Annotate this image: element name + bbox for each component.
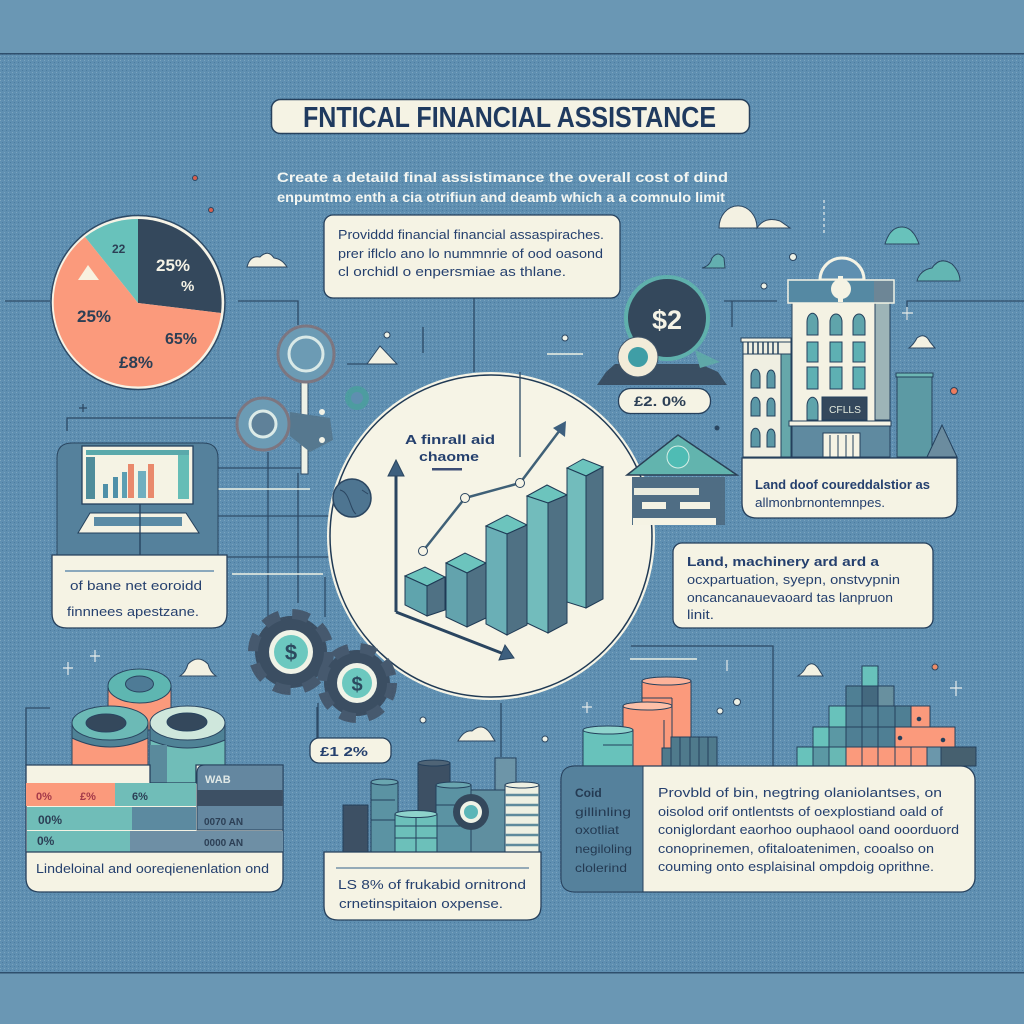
icon: coral cylinders [583,677,717,766]
panel: bottom right text: oisolod orif ontlentsts of oexplostiand oald of [658,804,943,819]
icon: bank building [741,258,957,457]
callout: bottom center: LS 8% of frukabid ornitrond [338,877,526,892]
panel: bottom right text: negiloling [575,842,632,856]
callout: land machinery [673,543,933,628]
panel: percentage table [26,765,283,892]
icons: magnifiers [237,326,366,474]
callout: finance: finnnees apestzane. [67,604,199,619]
icon: small bank [627,435,737,525]
panel: bottom right text: conoprinemen, ofitaloatenimen, cooalso on [658,841,934,856]
globe icon [333,479,371,517]
panel: bottom right text: Provbld of bin, negtring olaniolantses, on [658,785,942,800]
title: FNTICAL FINANCIAL ASSISTANCE [303,102,716,134]
pie chart: £8% [119,353,153,372]
panel: laptop [57,443,218,555]
callout: top center: cl orchidl o enpersmiae as thlane. [338,264,566,279]
panel: bottom right text: Coid [575,786,602,800]
callout: bottom center: crnetinspitaion oxpense. [339,896,503,911]
icon: dollar gears: $ [351,674,363,696]
callout: top center: Providdd financial financial assaspiraches. [338,227,604,242]
chart: pixel pyramid [797,666,976,766]
subtitle text [277,169,728,205]
pill: gear value [310,738,391,763]
chart axes [388,460,514,660]
bar chart: financial aid [405,459,603,635]
connector lines [5,298,1024,766]
callout: finance: of bane net eoroidd [70,578,202,593]
pill: badge value [618,388,710,414]
panel: percentage table: £% [80,791,96,803]
callout: land right [742,458,957,518]
central circle [327,372,655,700]
top band [0,0,1024,54]
panel: percentage table: 0070 AN [204,817,243,828]
callout: land machinery: Land, machinery ard ard a [687,554,880,569]
panel: bottom right text: clolerind [575,861,627,875]
panel: bottom right text: gillinling [575,805,631,819]
icon: city of cylinders [343,758,539,852]
chart label: A finrall aid [405,432,495,447]
callout: top center [324,215,620,298]
pill: gear value: £1 2% [320,744,369,759]
callout: top center: prer iflclo ano lo nummnrie of ood oasond [338,246,603,261]
pie chart: 65% [165,331,197,348]
callout: land machinery: oncancanauevaoard tas lanpruon [687,590,893,605]
callout: land right: allmonbrnontemnpes. [755,495,885,510]
callout: land machinery: linit. [687,607,714,622]
panel: percentage table: 00% [38,813,62,827]
icon: coin stacks [72,669,225,783]
panel: percentage table: 0% [36,791,52,803]
pie chart: 22 [112,242,126,256]
callout: land right: Land doof coureddalstior as [755,477,930,492]
pie chart: 25% [156,256,190,275]
sparkles [63,200,962,713]
panel: percentage table: 0% [37,834,55,848]
subtitle text: enpumtmo enth a cia otrifiun and deamb which a a comnulo limit [277,189,725,205]
trend arrow [418,372,566,556]
panel: bottom right text: coniglordant eaorhoo ouphaool oand ooorduord [658,822,959,837]
panel: percentage table: Lindeloinal and ooreqienenlation ond [36,861,269,876]
subtitle text: Create a detaild final assistimance the overall cost of dind [277,169,728,185]
panel: percentage table: 0000 AN [204,838,243,849]
pill: badge value: £2. 0% [634,393,687,409]
callout: bottom center [324,852,541,920]
panel: bottom right text [561,766,975,892]
panel: bottom right text: oxotliat [575,823,620,837]
icon: dollar badge: $2 [652,305,682,335]
callout: finance [52,555,227,628]
pie chart: 25% [77,307,111,326]
chart label [405,432,495,470]
panel: percentage table: WAB [205,774,231,786]
chart label: chaome [419,449,479,464]
callout: land machinery: ocxpartuation, syepn, onstvypnin [687,572,900,587]
icon: dollar gears [253,614,392,718]
decorative dots [192,176,958,742]
icon: bank building: CFLLS [829,405,861,416]
panel: percentage table: 6% [132,791,148,803]
clouds [180,206,960,741]
pie chart: % [181,278,194,295]
icon: dollar badge [597,277,727,385]
bottom band [0,972,1024,1024]
pie chart [51,216,225,390]
panel: bottom right text: couming onto esplaisinal ompdoig oprithne. [658,859,934,874]
icon: dollar gears: $ [285,640,297,665]
